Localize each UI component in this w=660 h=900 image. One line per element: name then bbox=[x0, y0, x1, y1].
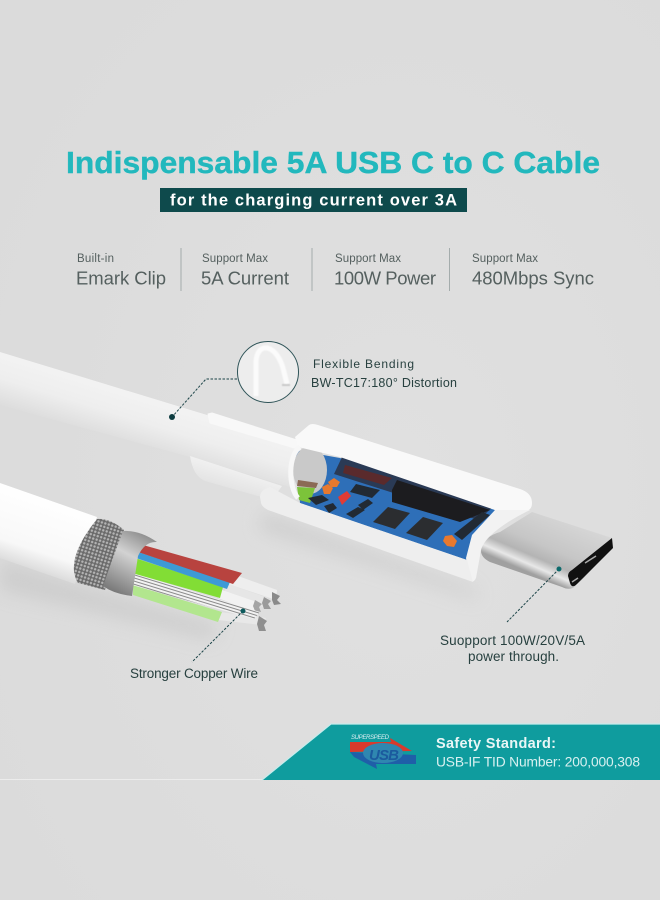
metal ring bbox=[103, 531, 157, 596]
callout text: power bbox=[440, 633, 585, 664]
small chips bbox=[308, 484, 490, 540]
icon: bent cable bbox=[256, 348, 290, 396]
housing top shell bbox=[295, 424, 532, 511]
spec: emark clip: Emark Clip bbox=[76, 268, 166, 288]
callout text: flexible bending: BW-TC17:180° Distortion bbox=[311, 376, 457, 390]
wire: blue bbox=[136, 552, 230, 589]
spec: current: Support Max bbox=[202, 253, 268, 265]
spec: power: 100W Power bbox=[334, 268, 436, 288]
safety banner bbox=[262, 724, 660, 780]
icon: superspeed usb logo: USB bbox=[369, 747, 399, 764]
wires bbox=[132, 545, 281, 631]
callout line: copper wire bbox=[192, 608, 246, 662]
cable tab bottom bbox=[190, 456, 282, 500]
connector opening bbox=[568, 538, 613, 586]
icon: superspeed usb logo: SUPERSPEED bbox=[351, 735, 390, 741]
cable tab top bbox=[208, 413, 300, 449]
dark red strip bbox=[343, 465, 392, 485]
magnifier: flexible bending bbox=[238, 342, 298, 402]
banner text: USB-IF TID Number: 200,000,308 bbox=[436, 754, 640, 770]
spec: sync bbox=[472, 253, 594, 288]
title: Indispensable 5A USB C to C Cable bbox=[66, 145, 600, 180]
callout text: flexible bending bbox=[311, 357, 457, 390]
subtitle banner: for the charging current over 3A bbox=[170, 192, 457, 210]
orange parts bbox=[322, 478, 457, 547]
callout text: power: power through. bbox=[468, 649, 559, 664]
banner text: Safety Standard: bbox=[436, 736, 556, 752]
cable shadows bbox=[0, 512, 480, 640]
connector housing bbox=[260, 424, 532, 582]
callout line: power bbox=[507, 566, 562, 622]
chip: square one bbox=[373, 507, 410, 529]
wire: red bbox=[138, 545, 242, 584]
tube rim bbox=[291, 447, 300, 498]
conductor ends bbox=[218, 576, 281, 631]
braided shield bbox=[74, 519, 124, 590]
lower cable bbox=[0, 483, 281, 631]
callout text: flexible bending: Flexible Bending bbox=[313, 357, 414, 371]
wire: light green bbox=[133, 585, 222, 622]
chip: square two bbox=[406, 517, 443, 540]
chip: large bbox=[392, 480, 490, 522]
housing lower shell bbox=[260, 487, 473, 582]
spec: current: 5A Current bbox=[201, 268, 289, 288]
spec: emark clip bbox=[76, 253, 166, 288]
cable core end bbox=[293, 446, 327, 494]
upper cable bbox=[0, 352, 300, 500]
icon: superspeed usb logo bbox=[350, 735, 416, 769]
spec: emark clip: Built-in bbox=[77, 253, 114, 265]
copper strands bbox=[132, 573, 260, 619]
spec: power bbox=[334, 253, 436, 288]
spec: sync: 480Mbps Sync bbox=[472, 268, 594, 288]
spec: current bbox=[201, 253, 289, 288]
spec: power: Support Max bbox=[335, 253, 401, 265]
callout text: power: Suopport 100W/20V/5A bbox=[440, 633, 585, 648]
housing front bbox=[466, 510, 530, 582]
spec: sync: Support Max bbox=[472, 253, 538, 265]
callout line: flexible bending bbox=[169, 379, 237, 420]
wire: green bbox=[132, 558, 223, 598]
banner text bbox=[436, 736, 640, 770]
red component bbox=[338, 491, 351, 505]
spec row bbox=[76, 248, 594, 291]
usb-c connector metal bbox=[481, 512, 613, 589]
callout text: copper wire: Stronger Copper Wire bbox=[130, 666, 258, 681]
circuit board bbox=[293, 446, 495, 560]
